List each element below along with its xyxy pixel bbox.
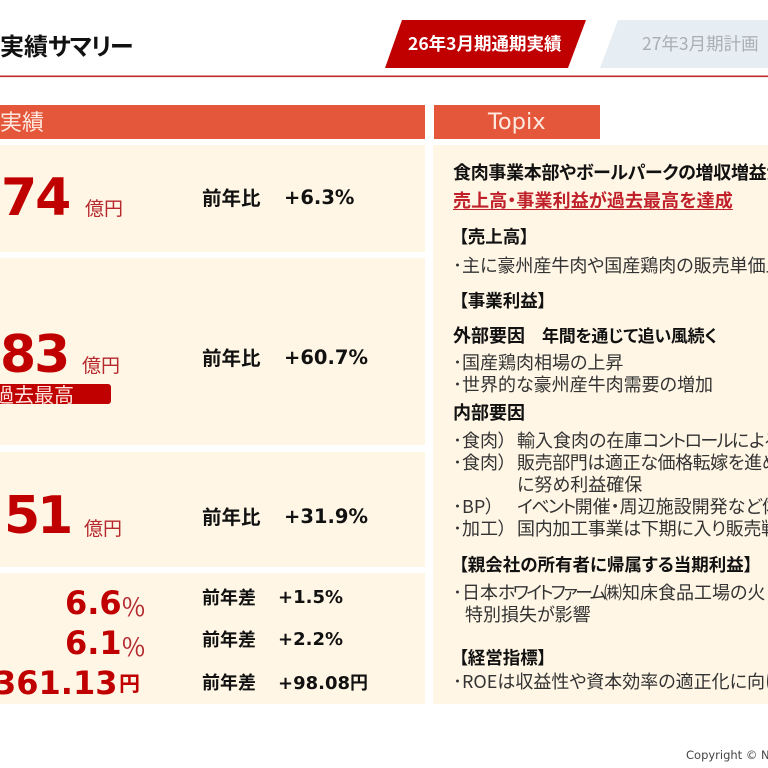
indicator 2 change label: 前年差	[202, 626, 256, 652]
external factors heading: 外部要因	[453, 322, 525, 348]
panel: sales	[0, 145, 425, 252]
indicator 2 unit: %	[122, 628, 145, 664]
profit unit: 億円	[82, 351, 120, 378]
indicator 1 change value: +1.5%	[278, 587, 343, 608]
business profit heading: 【事業利益】	[459, 288, 546, 313]
external factor 1: ･国産鶏肉相場の上昇	[453, 349, 623, 375]
profit value: 83	[0, 325, 68, 385]
panel: topix text	[433, 145, 768, 704]
sales year on year label: 前年比	[202, 182, 261, 211]
indicator 3 change value: +98.08円	[278, 669, 368, 695]
external factors text: 年間を通じて追い風続く	[542, 322, 717, 347]
record high badge	[0, 384, 111, 404]
internal factor 2 continued: に努め利益確保	[517, 471, 642, 497]
internal factor 4 label: ･加工）	[453, 515, 507, 541]
management indicators heading: 【経営指標】	[459, 645, 546, 670]
internal factor 3 label: ･BP）	[453, 493, 494, 519]
sales value: 74	[1, 168, 69, 228]
net profit bullet: ･日本ホワイトファーム㈱知床食品工場の火	[453, 579, 765, 605]
title: 実績サマリー	[0, 27, 132, 62]
indicator 2 value: 6.1	[65, 624, 122, 662]
pre-tax unit: 億円	[84, 514, 122, 541]
net profit bullet continued: 特別損失が影響	[465, 601, 591, 627]
profit year on year label: 前年比	[202, 342, 261, 371]
indicator 3 unit: 円	[119, 668, 140, 698]
tab: next period: 27年3月期計画	[642, 31, 759, 56]
internal factors heading: 内部要因	[453, 399, 525, 425]
panel: indicators	[0, 573, 425, 704]
pre-tax year on year value: +31.9%	[284, 505, 368, 528]
section heading: topix	[434, 105, 600, 139]
heading text: 実績	[0, 105, 44, 137]
sales year on year value: +6.3%	[284, 186, 354, 209]
panel: pre-tax profit	[0, 452, 425, 567]
sales unit: 億円	[85, 194, 123, 221]
header: title and period tabs	[0, 20, 768, 78]
external factor 2: ･世界的な豪州産牛肉需要の増加	[453, 371, 713, 397]
internal factor 1 label: ･食肉）	[453, 427, 507, 453]
pre-tax year on year label: 前年比	[202, 501, 261, 530]
indicator 2 change value: +2.2%	[278, 629, 343, 650]
headline highlight: 売上高・事業利益が過去最高を達成	[453, 187, 733, 213]
tab shapes	[0, 20, 768, 78]
tab: current period: 26年3月期通期実績	[408, 31, 561, 56]
indicator 1 change label: 前年差	[202, 584, 256, 610]
indicator 3 change label: 前年差	[202, 669, 256, 695]
net profit heading: 【親会社の所有者に帰属する当期利益】	[459, 552, 753, 577]
heading text: Topix	[488, 109, 546, 135]
panel: business profit	[0, 258, 425, 445]
section heading: results	[0, 105, 425, 139]
internal factor 2 label: ･食肉）	[453, 449, 507, 475]
sales heading: 【売上高】	[459, 224, 529, 249]
indicator 1 value: 6.6	[65, 584, 122, 622]
indicator 1 unit: %	[122, 588, 145, 624]
pre-tax value: 51	[4, 486, 70, 546]
profit year on year value: +60.7%	[284, 346, 368, 369]
